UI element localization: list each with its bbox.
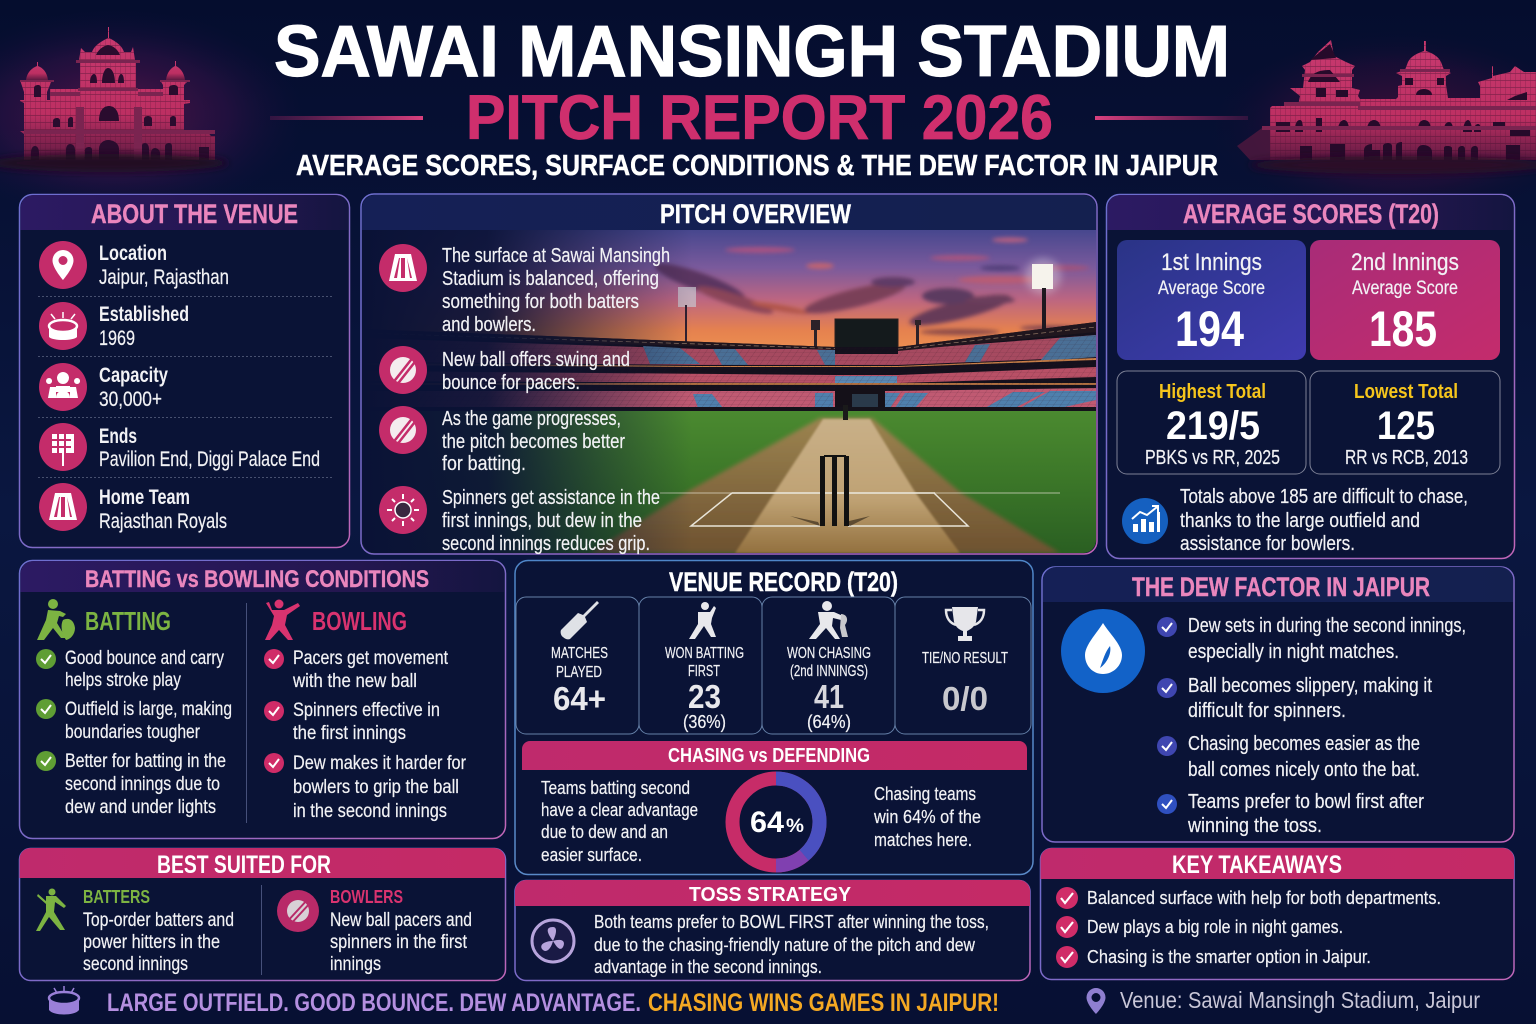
heading: toss strategy: TOSS STRATEGY <box>689 884 852 906</box>
heading: dew factor: THE DEW FACTOR IN JAIPUR <box>1132 572 1430 602</box>
stat: tie no result: TIE/NO RESULT <box>922 650 1008 667</box>
crease lines <box>660 493 1060 526</box>
column: batters: Top-order batters and <box>83 910 234 931</box>
bullet: game progress: the pitch becomes better <box>442 431 625 453</box>
panel: toss strategy: Both teams prefer to BOWL FIRST after winning the toss, <box>594 912 989 932</box>
stat: lowest total: Lowest Total <box>1354 381 1458 403</box>
item: capacity <box>39 363 168 411</box>
icon: coin toss <box>532 920 574 962</box>
column: batting: BATTING <box>85 606 171 636</box>
item: home team: Rajasthan Royals <box>99 510 227 533</box>
column: bowling: the first innings <box>293 723 406 744</box>
sub-panel: chasing vs defending: CHASING vs DEFENDING <box>668 745 870 767</box>
bullet: spinners <box>379 486 660 555</box>
column: bowling: with the new ball <box>292 671 417 692</box>
floodlights <box>678 258 1061 352</box>
panel: batting vs bowling conditions <box>20 560 506 838</box>
panel: pitch overview <box>361 194 1097 555</box>
grass <box>362 411 1096 553</box>
sub-panel: chasing vs defending: Teams batting second <box>541 778 690 798</box>
heading: about the venue: ABOUT THE VENUE <box>91 199 298 229</box>
stat: won chasing: (2nd INNINGS) <box>790 663 868 680</box>
illustration: right palace <box>1237 40 1536 174</box>
stat: won batting first: WON BATTING <box>665 645 744 662</box>
panel: venue record <box>515 560 1033 874</box>
bullet: new ball: bounce for pacers. <box>442 372 580 394</box>
column: bowlers <box>277 887 472 975</box>
column: batters: power hitters in the <box>83 932 220 953</box>
panel: the dew factor <box>1042 567 1514 842</box>
bullet: balanced surface: and bowlers. <box>442 314 536 336</box>
column: batting: Outfield is large, making <box>65 699 232 720</box>
column: batting: dew and under lights <box>65 797 216 818</box>
item: established: Established <box>99 303 189 326</box>
point 2 <box>1157 675 1432 722</box>
icon: bowler <box>265 600 300 640</box>
heading: average scores: AVERAGE SCORES (T20) <box>1183 199 1439 229</box>
column: batters: second innings <box>83 954 188 975</box>
point 4: Teams prefer to bowl first after <box>1188 791 1424 813</box>
sub-panel: chasing vs defending <box>522 741 1027 866</box>
point 1: especially in night matches. <box>1188 641 1399 663</box>
stat: won chasing: (64%) <box>807 712 851 732</box>
item: established <box>39 302 189 350</box>
icon: batter <box>37 599 75 640</box>
illustration: left palace <box>0 27 228 172</box>
item: capacity: 30,000+ <box>99 388 162 411</box>
note with chart icon: assistance for bowlers. <box>1180 533 1355 555</box>
stat: 2nd innings <box>1310 240 1500 360</box>
subtitle: pitch report 2026: PITCH REPORT 2026 <box>466 83 1053 153</box>
stat: 1st innings: 194 <box>1175 301 1244 357</box>
item: capacity: Capacity <box>99 364 168 387</box>
panel: average scores <box>1106 194 1514 558</box>
sub-panel: chasing vs defending: win 64% of the <box>873 807 981 827</box>
photo: stadium at sunset <box>362 230 1096 554</box>
title: SAWAI MANSINGH STADIUM <box>274 12 1230 92</box>
point 2: difficult for spinners. <box>1188 700 1346 722</box>
bullet: spinners: second innings reduces grip. <box>442 533 650 555</box>
panel: toss strategy: due to the chasing-friendly nature of the pitch and dew <box>594 935 976 955</box>
sub-panel: chasing vs defending: matches here. <box>874 830 972 850</box>
chart: 64 percent donut <box>732 778 820 866</box>
stat: 2nd innings: 185 <box>1369 301 1437 357</box>
stat: 1st innings <box>1117 240 1306 360</box>
stat: 2nd innings: Average Score <box>1352 278 1458 299</box>
subtitle: pitch report 2026 <box>270 83 1248 153</box>
tagline: AVERAGE SCORES, SURFACE CONDITIONS & THE DEW FACTOR IN JAIPUR <box>296 150 1218 182</box>
item: location: Location <box>99 242 167 265</box>
heading: batting vs bowling: BATTING vs BOWLING CONDITIONS <box>85 566 429 593</box>
panel: toss strategy: advantage in the second innings. <box>594 957 822 977</box>
icon: batter <box>36 888 66 931</box>
bullet: balanced surface: The surface at Sawai Mansingh <box>442 245 670 267</box>
bullet: new ball <box>379 346 630 394</box>
venue credit: Venue: Sawai Mansingh Stadium, Jaipur <box>1120 987 1480 1013</box>
stat: won batting first <box>639 597 762 734</box>
bullet: game progress: As the game progresses, <box>442 408 621 430</box>
stat: matches played <box>516 597 639 734</box>
takeaway 1: Balanced surface with help for both departments. <box>1087 888 1441 908</box>
column: batters: BATTERS <box>83 887 150 907</box>
column: bowling: in the second innings <box>293 801 447 822</box>
item: home team <box>39 483 227 533</box>
scoreboard <box>834 318 898 347</box>
point 4 <box>1157 791 1424 837</box>
column: bowling: Dew makes it harder for <box>293 753 467 774</box>
stat: won chasing <box>762 597 895 734</box>
column: bowlers: BOWLERS <box>330 887 403 907</box>
column: bowling: BOWLING <box>312 606 407 636</box>
bullet: balanced surface: Stadium is balanced, offering <box>442 268 659 290</box>
sub-panel: chasing vs defending: have a clear advantage <box>541 800 698 820</box>
bullet: spinners: Spinners get assistance in the <box>442 487 660 509</box>
column: batting: helps stroke play <box>65 670 181 691</box>
column: batting <box>36 599 232 818</box>
stat: won batting first: FIRST <box>688 663 720 680</box>
column: batting: second innings due to <box>65 774 220 795</box>
point 3: Chasing becomes easier as the <box>1188 733 1420 755</box>
stat: won batting first: (36%) <box>683 712 726 732</box>
point 1 <box>1157 615 1466 663</box>
item: ends <box>39 423 320 471</box>
stat: matches played: PLAYED <box>556 664 602 681</box>
icon: ball <box>277 890 319 932</box>
footer banner: CHASING WINS GAMES IN JAIPUR! <box>648 989 999 1017</box>
icon: stadium <box>49 986 79 1014</box>
point 3: ball comes nicely onto the bat. <box>1188 759 1420 781</box>
chart: 64 percent donut: 64 <box>750 806 784 839</box>
column: bowling: bowlers to grip the ball <box>293 777 459 798</box>
heading: key takeaways: KEY TAKEAWAYS <box>1172 851 1342 879</box>
bullet: balanced surface: something for both batters <box>442 291 639 313</box>
heading: venue record: VENUE RECORD (T20) <box>669 567 898 597</box>
chart: 64 percent donut: % <box>786 816 804 837</box>
stat: lowest total: RR vs RCB, 2013 <box>1345 447 1468 469</box>
item: ends: Pavilion End, Diggi Palace End <box>99 448 320 471</box>
item: ends: Ends <box>99 425 137 448</box>
point 3 <box>1157 733 1420 781</box>
bullet: new ball: New ball offers swing and <box>442 349 630 371</box>
column: batting: Good bounce and carry <box>65 648 224 669</box>
heading: best suited for: BEST SUITED FOR <box>157 851 331 879</box>
column: bowling: Pacers get movement <box>293 648 449 669</box>
point 1: Dew sets in during the second innings, <box>1188 615 1466 637</box>
bullet: game progress <box>379 406 625 475</box>
point 2: Ball becomes slippery, making it <box>1188 675 1432 697</box>
icon: water drop <box>1061 609 1145 693</box>
stat: highest total: Highest Total <box>1159 381 1266 403</box>
column: bowlers: spinners in the first <box>330 932 468 953</box>
bullet: game progress: for batting. <box>442 453 526 475</box>
stat: 2nd innings: 2nd Innings <box>1351 249 1459 276</box>
footer banner: LARGE OUTFIELD. GOOD BOUNCE. DEW ADVANTAGE. <box>107 989 641 1017</box>
stat: highest total <box>1117 371 1306 474</box>
bullet: balanced surface <box>379 244 670 336</box>
note with chart icon: thanks to the large outfield and <box>1180 510 1420 532</box>
column: batting: boundaries tougher <box>65 722 201 743</box>
column: bowling <box>264 600 467 822</box>
stat: matches played: 64+ <box>553 680 606 717</box>
heading: pitch overview: PITCH OVERVIEW <box>660 199 851 229</box>
stat: highest total: 219/5 <box>1166 404 1260 448</box>
note with chart icon <box>1122 486 1468 555</box>
pitch surface <box>590 418 1060 553</box>
footer banner <box>49 986 999 1017</box>
note with chart icon: Totals above 185 are difficult to chase, <box>1180 486 1468 508</box>
panel: toss strategy <box>515 880 1030 980</box>
sub-panel: chasing vs defending: due to dew and an <box>541 822 668 842</box>
panel: best suited for <box>20 848 506 980</box>
stat: lowest total <box>1310 371 1500 474</box>
stat: highest total: PBKS vs RR, 2025 <box>1145 447 1280 469</box>
stat: tie no result: 0/0 <box>942 680 988 717</box>
column: bowlers: innings <box>330 954 381 975</box>
stat: 1st innings: 1st Innings <box>1161 249 1262 276</box>
panel: key takeaways <box>1040 848 1514 980</box>
stands <box>362 322 1096 412</box>
sub-panel: chasing vs defending: Chasing teams <box>874 784 976 804</box>
item: home team: Home Team <box>99 486 190 509</box>
stat: won chasing: 41 <box>814 678 844 715</box>
stat: matches played: MATCHES <box>551 645 608 662</box>
item: location <box>39 241 229 289</box>
stat: won batting first: 23 <box>688 678 721 715</box>
sub-panel: chasing vs defending: easier surface. <box>541 845 642 865</box>
stumps <box>790 405 870 526</box>
stat: 1st innings: Average Score <box>1158 278 1265 299</box>
point 4: winning the toss. <box>1187 815 1322 837</box>
column: bowlers: New ball pacers and <box>330 910 472 931</box>
column: batters <box>36 887 234 975</box>
takeaway 3: Chasing is the smarter option in Jaipur. <box>1087 947 1371 967</box>
item: location: Jaipur, Rajasthan <box>99 266 229 289</box>
stat: lowest total: 125 <box>1377 404 1435 448</box>
stat: tie no result <box>895 597 1031 734</box>
takeaway 2: Dew plays a big role in night games. <box>1087 917 1343 937</box>
stat: won chasing: WON CHASING <box>787 645 871 662</box>
item: established: 1969 <box>99 327 135 350</box>
column: batting: Better for batting in the <box>65 751 226 772</box>
column: bowling: Spinners effective in <box>293 700 440 721</box>
panel: about the venue <box>20 194 350 548</box>
bullet: spinners: first innings, but dew in the <box>442 510 642 532</box>
